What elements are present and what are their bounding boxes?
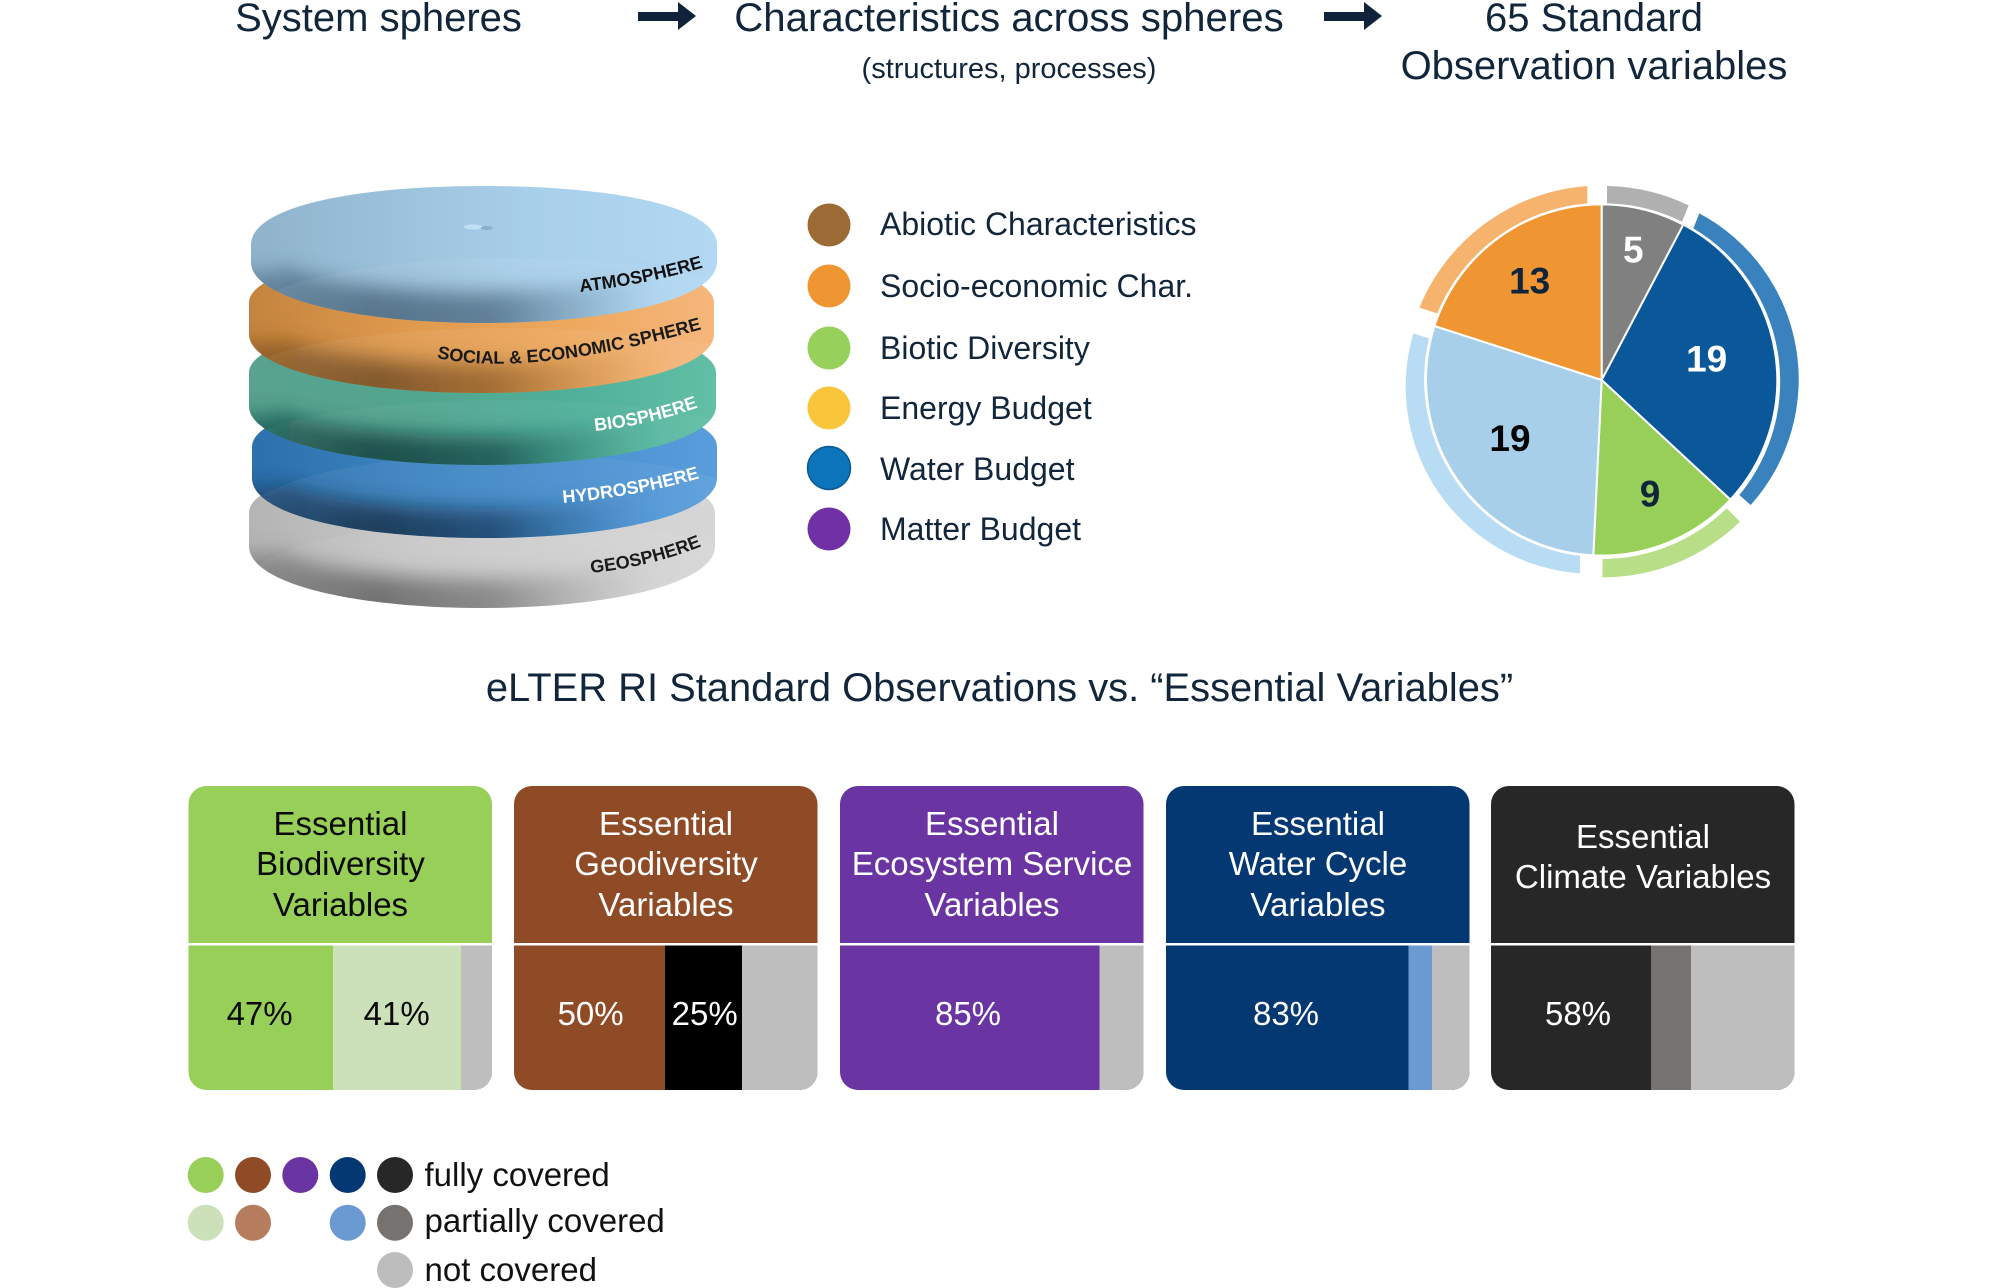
panel: essential biodiversity variables: 47% [227,995,293,1032]
legend item: energy budget [808,386,1092,430]
section title: eLTER RI Standard Observations vs. “Essential Variables” [486,666,1513,710]
legend item: matter budget: Matter Budget [880,511,1081,547]
disk: atmosphere [251,186,717,323]
legend item: biotic diversity [808,326,1090,370]
pie chart: 65 standard observation variables [1406,186,1799,577]
heading: characteristics across spheres [734,0,1284,85]
panel: essential water cycle variables: 83% [1253,995,1319,1032]
panel: essential climate variables: Climate Variables [1515,858,1771,895]
panel: essential water cycle variables [1166,786,1470,1090]
legend item: energy budget: Energy Budget [880,390,1092,426]
legend item: water budget [808,446,1075,490]
legend item: biotic diversity: Biotic Diversity [880,330,1090,366]
panel: essential ecosystem service variables: Essential [925,805,1059,842]
legend row: fully covered: fully covered [424,1156,610,1193]
disk: biosphere [249,354,716,465]
disk: biosphere: BIOSPHERE [594,396,698,431]
disk: hydrosphere: HYDROSPHERE [563,466,699,503]
panel: essential biodiversity variables: Variables [273,886,408,923]
panel: essential ecosystem service variables [840,786,1144,1090]
panel: essential geodiversity variables: 50% [558,995,624,1032]
pie values: 13 [1509,260,1550,301]
heading: characteristics across spheres: (structures, processes) [862,53,1156,85]
pie values: 19 [1686,338,1727,379]
pie values [1489,230,1727,514]
heading: 65 standard observation variables [1401,0,1787,88]
pie slices [1426,204,1777,556]
panel: essential ecosystem service variables: 85% [935,995,1001,1032]
panel: essential geodiversity variables [514,786,818,1090]
panel: essential water cycle variables: Essential [1251,805,1385,842]
panel: essential climate variables: 58% [1545,995,1611,1032]
arrow: spheres to characteristics [638,2,696,30]
panel: essential biodiversity variables: Essential [274,805,407,842]
panel: essential biodiversity variables: 41% [364,995,430,1032]
panel: essential climate variables: Essential [1576,818,1710,855]
panel: essential water cycle variables: Variables [1250,886,1386,923]
panel: essential geodiversity variables: Geodiversity [574,845,758,882]
panel: essential ecosystem service variables: Variables [924,886,1060,923]
arrow: characteristics to variables [1324,2,1382,30]
pie values: 5 [1623,230,1644,271]
panel: essential geodiversity variables: 25% [672,995,738,1032]
legend row: partially covered [188,1202,665,1241]
disk: social and economic sphere: SOCIAL & ECONOMIC SPHERE [438,318,702,364]
legend item: socio-economic: Socio-economic Char. [880,268,1193,304]
stacked sphere disks [249,186,717,608]
legend: characteristics [808,204,1197,550]
panel: essential water cycle variables: Water Cycle [1229,845,1407,882]
legend row: not covered: not covered [424,1251,597,1288]
pie values: 9 [1640,473,1660,514]
panel: essential climate variables [1491,786,1795,1090]
panel: essential geodiversity variables: Essential [599,805,733,842]
legend item: socio-economic [808,264,1193,308]
legend item: matter budget [808,508,1081,550]
legend item: abiotic [808,204,1197,246]
panel: essential biodiversity variables [188,786,492,1090]
pie values: 19 [1489,418,1531,459]
panel: essential biodiversity variables: Biodiversity [256,845,425,882]
legend row: partially covered: partially covered [424,1202,665,1239]
panel: essential ecosystem service variables: Ecosystem Service [852,845,1132,882]
disk: hydrosphere [252,427,717,538]
legend item: water budget: Water Budget [880,451,1075,487]
legend item: abiotic: Abiotic Characteristics [880,206,1197,242]
legend row: fully covered [188,1156,610,1193]
disk: social and economic sphere [249,283,714,393]
legend: coverage [188,1156,665,1288]
disk: geosphere: GEOSPHERE [590,535,701,572]
panel: essential geodiversity variables: Variables [598,886,734,923]
disk: geosphere [249,496,715,608]
disk: atmosphere: ATMOSPHERE [580,256,703,292]
outer ring segments [1406,186,1799,577]
heading: 65 standard observation variables: Observation variables [1401,44,1787,88]
